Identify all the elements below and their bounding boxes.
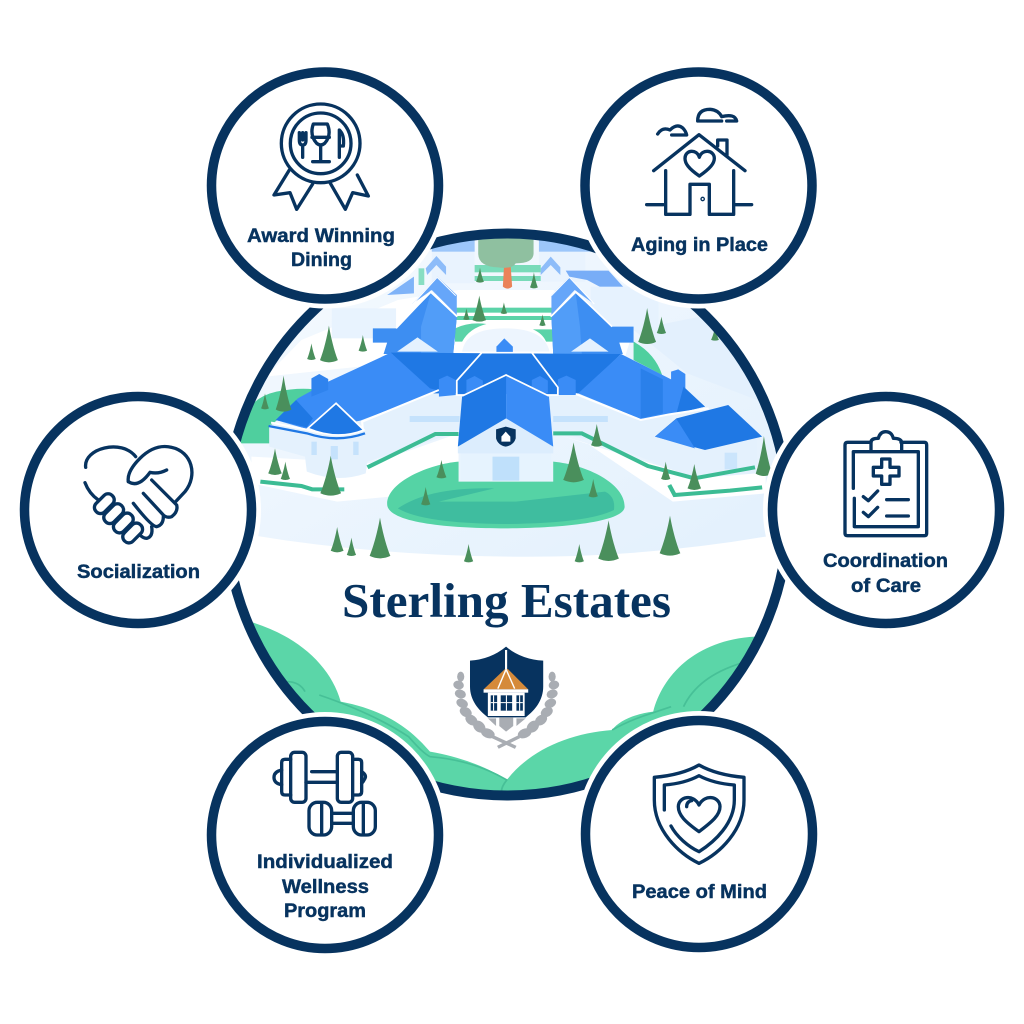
icon: clipboard with cross <box>845 432 927 536</box>
panel: individualized wellness program <box>202 712 448 958</box>
central oval lawn <box>387 462 625 528</box>
label: of Care <box>851 576 921 597</box>
white lawns <box>251 290 766 502</box>
laurel wreath <box>452 672 561 747</box>
main building walls <box>269 394 608 478</box>
ground <box>242 240 776 557</box>
panel: campus illustration <box>240 238 776 790</box>
upper left wing <box>373 277 457 354</box>
left and right lawns <box>241 389 314 443</box>
right end pavilion <box>655 405 762 478</box>
panel: peace of mind <box>576 711 822 957</box>
main roofs <box>269 338 709 438</box>
tree with orange trunk <box>478 238 534 289</box>
green borders <box>260 433 762 495</box>
label: Socialization <box>77 562 200 583</box>
centre gable roof <box>457 353 558 395</box>
icon: medal with dining set <box>274 104 368 209</box>
upper right wing <box>551 277 634 354</box>
green strips <box>419 265 553 342</box>
icon: heart handshake <box>85 446 192 545</box>
label: Aging in Place <box>631 235 768 256</box>
green hills <box>253 622 754 790</box>
panel: socialization <box>15 387 261 633</box>
panel: aging in place <box>576 62 822 308</box>
background houses <box>332 240 626 338</box>
label: Award Winning <box>247 226 395 247</box>
central ring <box>226 234 788 796</box>
front pavilion <box>458 375 553 481</box>
icon: shield with heart <box>654 765 744 863</box>
pale side bands <box>634 318 695 340</box>
cupola <box>484 650 528 732</box>
label: Dining <box>291 250 352 271</box>
label: Coordination <box>823 551 948 572</box>
label: Peace of Mind <box>632 882 767 903</box>
label: Individualized <box>257 852 393 873</box>
label: Program <box>284 901 366 922</box>
left turret roof <box>308 403 364 435</box>
pine trees <box>261 268 772 562</box>
icon: house with heart <box>647 109 752 214</box>
title: Sterling Estates <box>342 573 671 628</box>
panel: award winning dining <box>202 62 448 308</box>
logo: shield crest <box>452 647 561 747</box>
panel: coordination of care <box>763 387 1009 633</box>
shield <box>470 647 543 717</box>
centre courtyard arc <box>462 328 550 352</box>
label: Wellness <box>282 877 369 898</box>
icon: dumbbells <box>274 752 375 835</box>
